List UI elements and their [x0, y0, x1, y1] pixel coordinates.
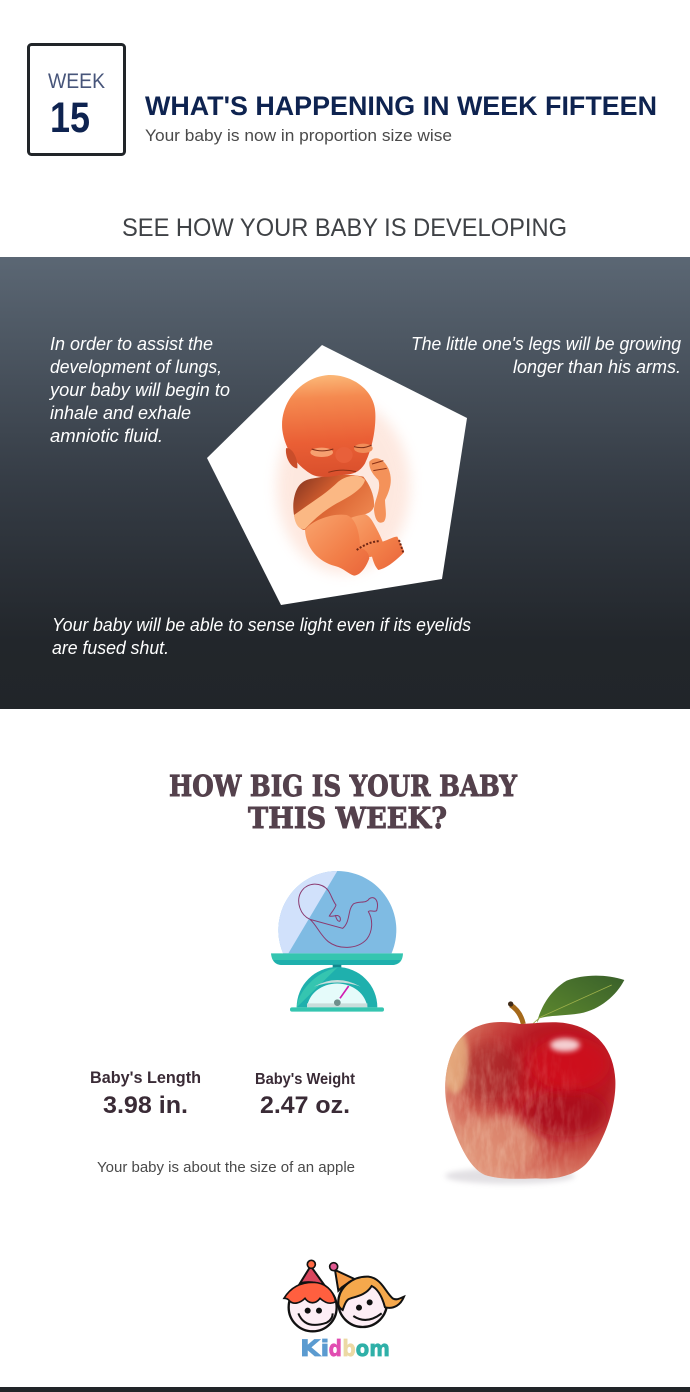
- text: lungs fact: [48, 334, 230, 446]
- wordmark: d: [329, 1337, 342, 1362]
- text: light fact: Your baby will be able to sense light even if its eyelids: [52, 615, 471, 635]
- pentagon frame: [207, 345, 467, 605]
- text: legs fact: longer than his arms.: [513, 357, 681, 377]
- text: lungs fact: amniotic fluid.: [50, 426, 163, 446]
- panel: baby development: [0, 257, 690, 709]
- stat: baby's weight: Baby's Weight: [255, 1071, 355, 1088]
- icon: apple: [433, 976, 624, 1184]
- title: WHAT'S HAPPENING IN WEEK FIFTEEN: [145, 91, 657, 121]
- subtitle: Your baby is now in proportion size wise: [145, 127, 452, 145]
- section heading: how big: HOW BIG IS YOUR BABY: [169, 769, 517, 803]
- head: [282, 375, 375, 477]
- front leg: [305, 515, 369, 576]
- text: legs fact: The little one's legs will be growing: [411, 334, 681, 354]
- wordmark: b: [342, 1337, 356, 1362]
- text: light fact: [52, 615, 471, 658]
- text: lungs fact: development of lungs,: [50, 357, 222, 377]
- back leg: [347, 513, 404, 570]
- toes: [357, 540, 403, 553]
- logo: kidbom: [284, 1260, 404, 1362]
- text: light fact: are fused shut.: [52, 638, 169, 658]
- icon: baby on scale: [271, 871, 403, 1012]
- far arm: [369, 458, 391, 523]
- torso: [293, 475, 374, 530]
- face: [310, 448, 333, 457]
- caption: size comparison: Your baby is about the size of an apple: [97, 1160, 355, 1176]
- text: lungs fact: inhale and exhale: [50, 403, 191, 423]
- near arm: [294, 476, 365, 529]
- bottom bar: [0, 1387, 690, 1392]
- fetus illustration: [277, 375, 410, 576]
- section heading: how big: THIS WEEK?: [248, 801, 447, 835]
- stat: baby's length: Baby's Length: [90, 1069, 201, 1087]
- stat: baby's length: 3.98 in.: [103, 1092, 188, 1119]
- wordmark: [300, 1337, 390, 1362]
- ear: [286, 448, 297, 468]
- section heading: how big: [169, 769, 517, 835]
- wordmark: Ki: [300, 1337, 329, 1362]
- stat: baby's length: [90, 1069, 201, 1119]
- week badge: WEEK: [48, 70, 105, 93]
- week badge: 15: [50, 94, 90, 142]
- wordmark: om: [356, 1337, 390, 1362]
- text: legs fact: [411, 334, 681, 377]
- week badge: [28, 44, 124, 154]
- section heading: SEE HOW YOUR BABY IS DEVELOPING: [122, 214, 567, 242]
- stat: baby's weight: [255, 1071, 355, 1119]
- text: lungs fact: In order to assist the: [50, 334, 213, 354]
- text: lungs fact: your baby will begin to: [48, 380, 230, 400]
- stat: baby's weight: 2.47 oz.: [260, 1092, 350, 1119]
